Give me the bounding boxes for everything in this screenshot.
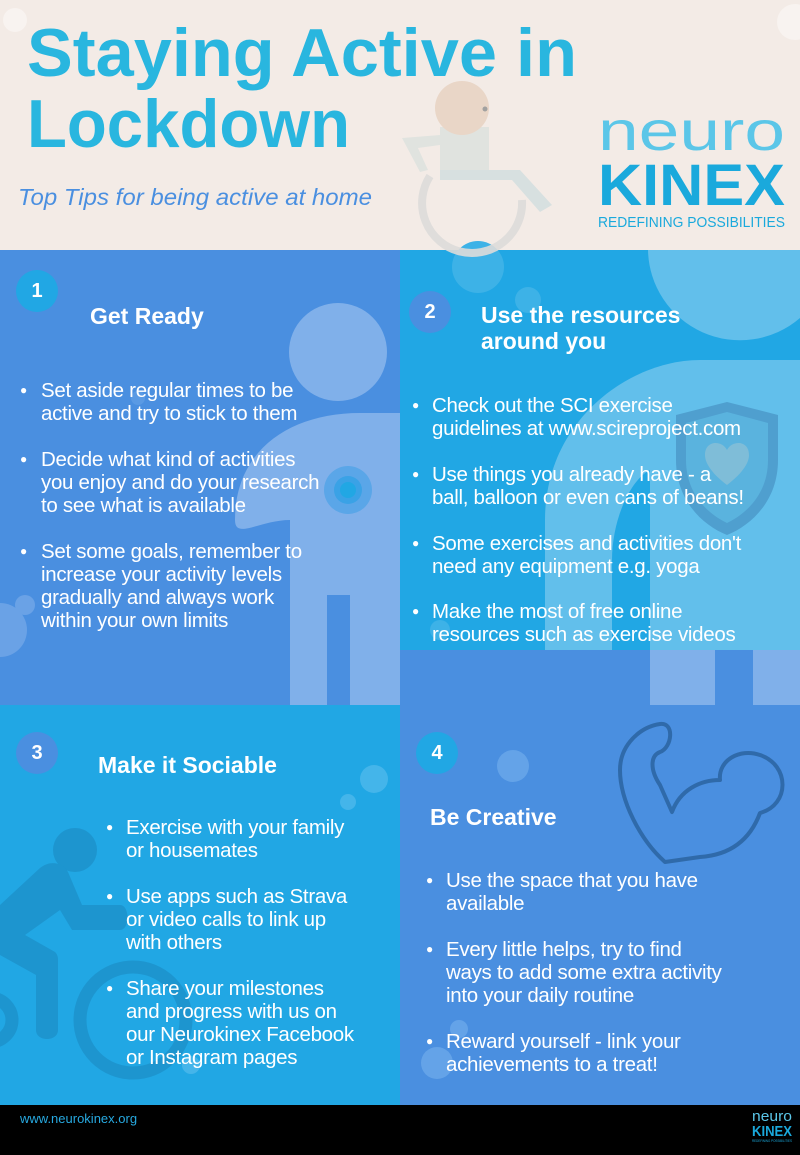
bullets 1: Decide what kind of activities [41,448,295,471]
bullets 3: with others [126,931,222,954]
title: Lockdown [27,86,350,160]
bullets 4: ● [426,942,433,956]
number 3: 3 [31,742,43,764]
bullets 1: increase your activity levels [41,563,282,586]
logo: neuro [598,100,785,162]
bullets 4: Reward yourself - link your [446,1030,681,1053]
logo: REDEFINING POSSIBILITIES [598,214,785,231]
panel: get ready [16,270,319,632]
bullets 2: ● [412,536,419,550]
panel4 [497,750,529,782]
bullets 1 [20,379,319,632]
footer logo: neuro [752,1108,792,1125]
bullets 4: ● [426,873,433,887]
panel: sociable [16,732,354,1069]
bullets 2 [412,394,744,646]
number 4: 4 [431,742,443,764]
bullets 3: Exercise with your family [126,816,344,839]
bullets 4: Use the space that you have [446,869,698,892]
header wheelchair [402,81,552,253]
bullets 3: or video calls to link up [126,908,326,931]
title [27,15,577,160]
bullets 2: ● [412,467,419,481]
heading 1: Get Ready [90,303,204,329]
logo: KINEX [598,153,785,218]
subtitle: Top Tips for being active at home [18,184,372,210]
number 4 [416,732,458,774]
bullets 3: Share your milestones [126,977,324,1000]
bullets 2: ball, balloon or even cans of beans! [432,486,744,509]
bullets 1: active and try to stick to them [41,402,297,425]
bullets 3: ● [106,889,113,903]
bullets 1: Set some goals, remember to [41,540,302,563]
number 1 [16,270,58,312]
number 2 [409,291,451,333]
footer url: www.neurokinex.org [20,1111,137,1126]
bullets 2: ● [412,604,419,618]
bullets 2: need any equipment e.g. yoga [432,555,699,578]
bullets 4: into your daily routine [446,984,634,1007]
bullets 4 [426,869,722,1076]
number 1: 1 [31,280,43,302]
panel: creative [416,732,722,1076]
heading 2: around you [481,328,606,354]
bullets 1: within your own limits [41,609,228,632]
heading 3: Make it Sociable [98,752,277,778]
bullets 4: ● [426,1034,433,1048]
bullets 1: you enjoy and do your research [41,471,319,494]
bullets 4: available [446,892,524,915]
heading 4: Be Creative [430,804,557,830]
bullets 3: ● [106,981,113,995]
bullets 2: Check out the SCI exercise [432,394,673,417]
logo [598,100,785,231]
bullets 4: ways to add some extra activity [446,961,722,984]
panel3 cyclist [0,828,128,1039]
bullets 2: resources such as exercise videos [432,623,735,646]
bullets 2: ● [412,398,419,412]
bullets 1: gradually and always work [41,586,274,609]
bullets 3: ● [106,820,113,834]
bullets 3: and progress with us on [126,1000,337,1023]
bullets 2: Use things you already have - a [432,463,711,486]
panel: resources [409,291,744,646]
bullets 2: guidelines at www.scireproject.com [432,417,741,440]
bullets 2: Make the most of free online [432,600,682,623]
title: Staying Active in [27,15,577,91]
bullets 3: Use apps such as Strava [126,885,347,908]
panel2 shapes [452,241,504,293]
bullets 1: ● [20,452,27,466]
bullets 1: to see what is available [41,494,246,517]
bullets 3: our Neurokinex Facebook [126,1023,354,1046]
bullets 1: Set aside regular times to be [41,379,293,402]
footer [20,1108,792,1143]
bullets 4: Every little helps, try to find [446,938,682,961]
bullets 1: ● [20,544,27,558]
number 3 [16,732,58,774]
bullets 4: achievements to a treat! [446,1053,658,1076]
heading 2 [481,302,680,354]
bullets 3: or housemates [126,839,258,862]
number 2: 2 [424,301,436,323]
bullets 3: or Instagram pages [126,1046,297,1069]
bullets 3 [106,816,354,1069]
heading 2: Use the resources [481,302,680,328]
footer logo [752,1108,792,1143]
panel1 figure [235,303,400,705]
bullets 2: Some exercises and activities don't [432,532,741,555]
bullets 1: ● [20,383,27,397]
